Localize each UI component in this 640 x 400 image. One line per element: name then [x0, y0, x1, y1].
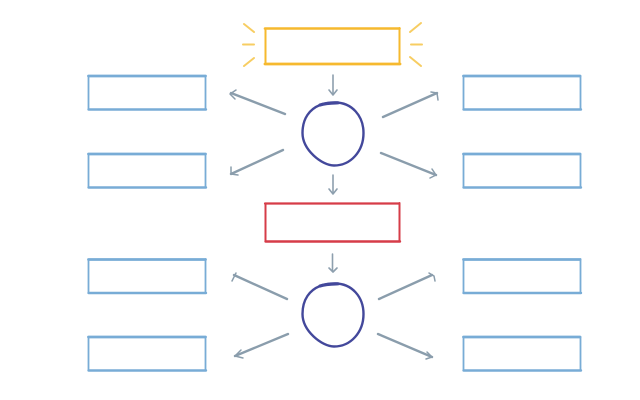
icon: left rays — [243, 24, 254, 66]
arrow: circle two upper right — [379, 273, 435, 299]
panel: blue box right 3 — [464, 259, 581, 293]
panel: blue box right 1 — [464, 76, 581, 110]
arrow: circle one lower left — [231, 150, 283, 175]
arrow: circle two lower right — [378, 334, 432, 359]
panel: blue box right 2 — [464, 154, 581, 188]
circle one — [302, 102, 364, 166]
arrow: circle two lower left — [235, 334, 288, 358]
panel: blue box left 1 — [88, 76, 206, 110]
arrow: circle one upper right — [383, 92, 438, 117]
arrow: circle two upper left — [232, 273, 287, 299]
panel: blue box left 3 — [88, 259, 206, 293]
circle two — [302, 284, 364, 346]
arrow: yellow box to circle one — [329, 75, 337, 95]
arrow: circle one to red box — [329, 175, 337, 194]
arrow: red box to circle two — [329, 254, 337, 272]
arrow: circle one lower right — [381, 153, 436, 178]
arrow: circle one upper left — [230, 90, 285, 114]
panel: red middle box — [265, 203, 400, 242]
panel: yellow top box — [265, 28, 400, 64]
panel: blue box left 2 — [88, 154, 206, 188]
panel: blue box right 4 — [464, 337, 581, 370]
icon: right rays — [410, 23, 422, 66]
panel: blue box left 4 — [88, 337, 206, 370]
